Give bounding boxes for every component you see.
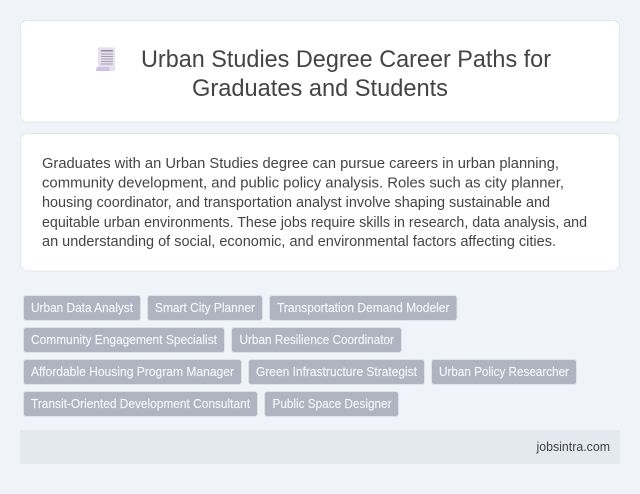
tag: Urban Data Analyst: Urban Data Analyst [31,301,133,315]
icon: document scroll [96,47,115,71]
tag: Transit-Oriented Development Consultant [24,392,258,416]
tag: Urban Data Analyst [24,296,140,320]
tag: Public Space Designer: Public Space Designer [272,397,392,411]
tag: Smart City Planner [148,296,262,320]
panel: description [20,134,620,271]
footer source text: jobsintra.com [536,440,610,454]
panel: header [20,20,620,122]
tag: Green Infrastructure Strategist [248,360,424,384]
tag: Urban Policy Researcher [432,360,576,384]
tag: Green Infrastructure Strategist: Green Infrastructure Strategist [256,365,417,379]
tag: Smart City Planner: Smart City Planner [155,301,255,315]
tag: Public Space Designer [264,392,398,416]
tag: Transportation Demand Modeler [270,296,457,320]
panel: career tags [24,296,576,416]
tag: Affordable Housing Program Manager: Affordable Housing Program Manager [31,365,234,379]
description text [42,156,587,250]
title: Graduates and Students [192,75,448,102]
description text: housing coordinator, and transportation analyst involve shaping sustainable and [42,195,550,211]
tag: Affordable Housing Program Manager [24,360,242,384]
description text: equitable urban environments. These jobs require skills in research, data analysis, and [42,215,587,231]
tag: Transit-Oriented Development Consultant: Transit-Oriented Development Consultant [31,397,250,411]
tag: Community Engagement Specialist: Community Engagement Specialist [31,333,217,347]
tag: Community Engagement Specialist [24,328,224,352]
tag: Urban Resilience Coordinator [232,328,402,352]
footer [20,430,620,464]
tag: Urban Resilience Coordinator: Urban Resilience Coordinator [240,333,394,347]
description text: community development, and public policy analysis. Roles such as city planner, [42,176,564,192]
title: Urban Studies Degree Career Paths for [141,46,551,73]
tag: Urban Policy Researcher: Urban Policy Researcher [439,365,569,379]
tag: Transportation Demand Modeler: Transportation Demand Modeler [277,301,450,315]
title [141,46,551,102]
description text: Graduates with an Urban Studies degree can pursue careers in urban planning, [42,156,559,172]
description text: an understanding of social, economic, and environmental factors affecting cities. [42,234,556,250]
